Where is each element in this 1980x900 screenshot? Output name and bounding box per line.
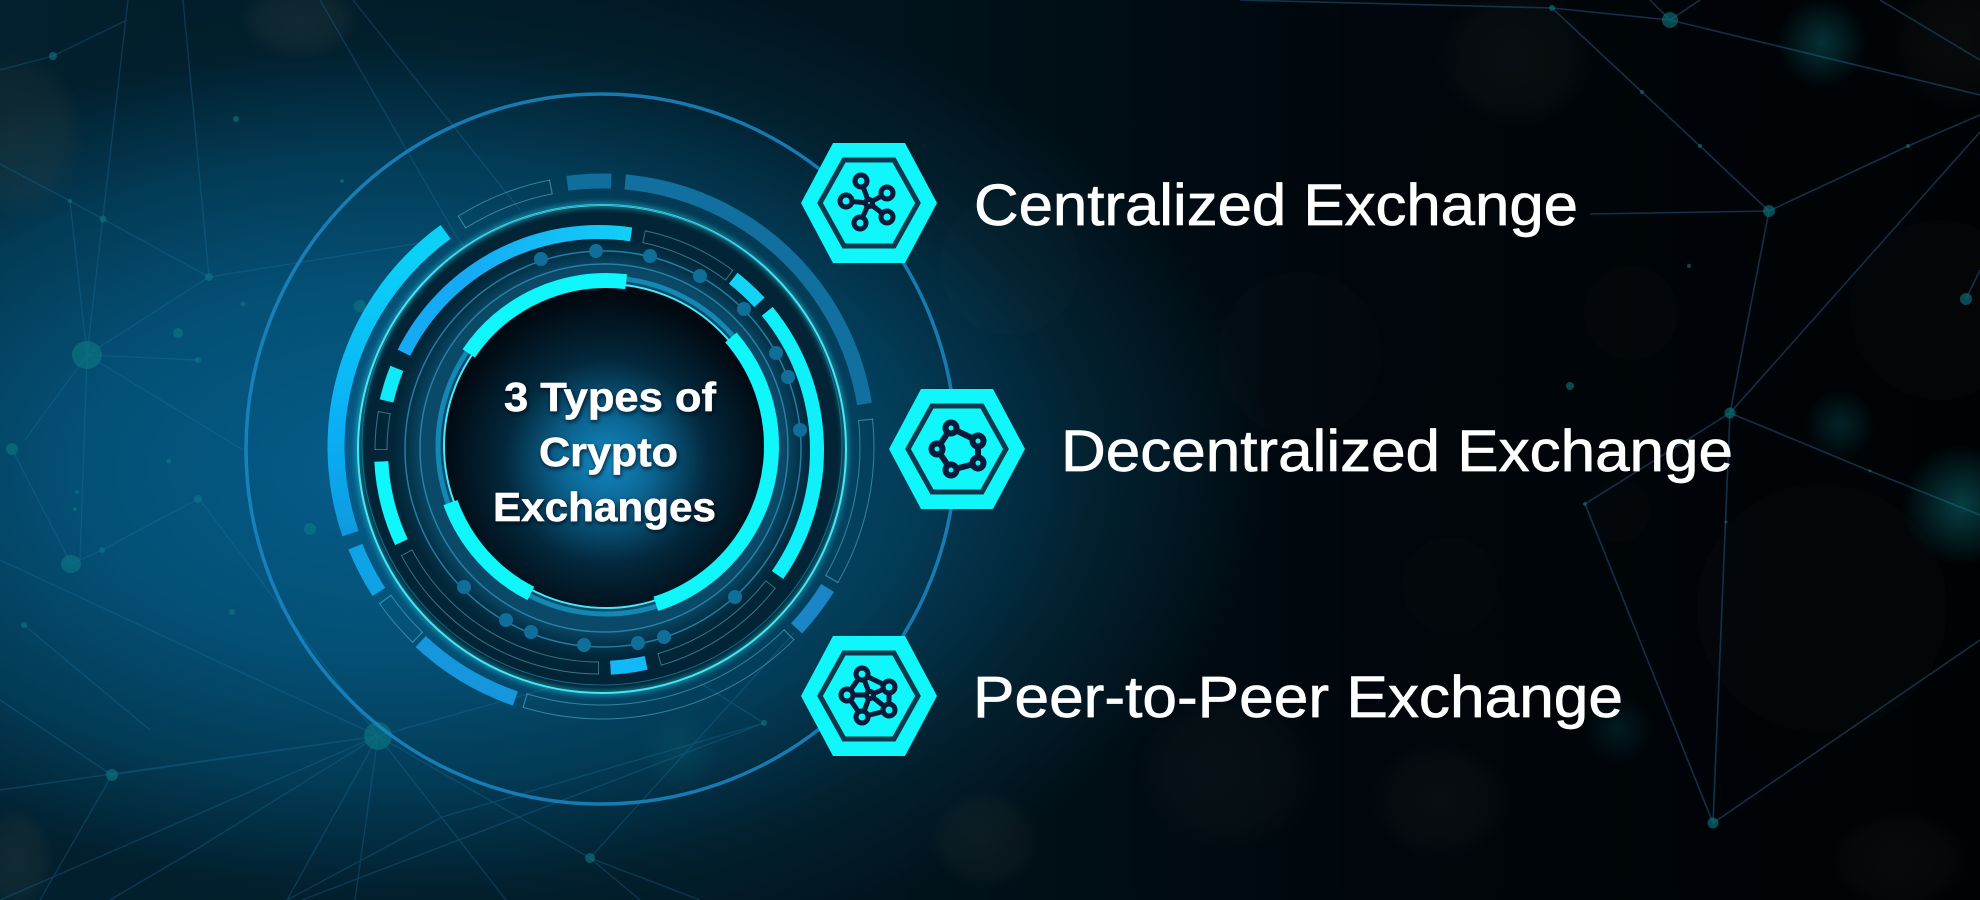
label: decentralized exchange: Decentralized Exchange — [1061, 419, 1733, 484]
central disc — [438, 278, 774, 614]
circuit rings with dots — [405, 244, 807, 652]
label: peer-to-peer exchange: Peer-to-Peer Exchange — [973, 665, 1623, 730]
title — [493, 374, 716, 530]
outer segmented band — [217, 62, 987, 832]
title: Exchanges — [493, 484, 716, 530]
large outer ring — [246, 94, 956, 804]
icon: peer-to-peer mesh hexagon — [801, 636, 937, 756]
background: network left — [0, 0, 794, 900]
hud ring system — [217, 62, 987, 832]
background: teal light blobs — [640, 0, 1980, 790]
title: 3 Types of — [504, 374, 716, 420]
title: Crypto — [539, 429, 678, 475]
inner thick cyan arcs — [373, 213, 839, 679]
background: network right — [1240, 0, 1980, 823]
icon: decentralized ring hexagon — [889, 389, 1025, 509]
label: centralized exchange: Centralized Exchange — [974, 173, 1578, 238]
icon: centralized hub hexagon — [801, 143, 937, 263]
middle segmented band — [285, 136, 913, 764]
dark inner plate and cyan ring — [358, 205, 846, 693]
